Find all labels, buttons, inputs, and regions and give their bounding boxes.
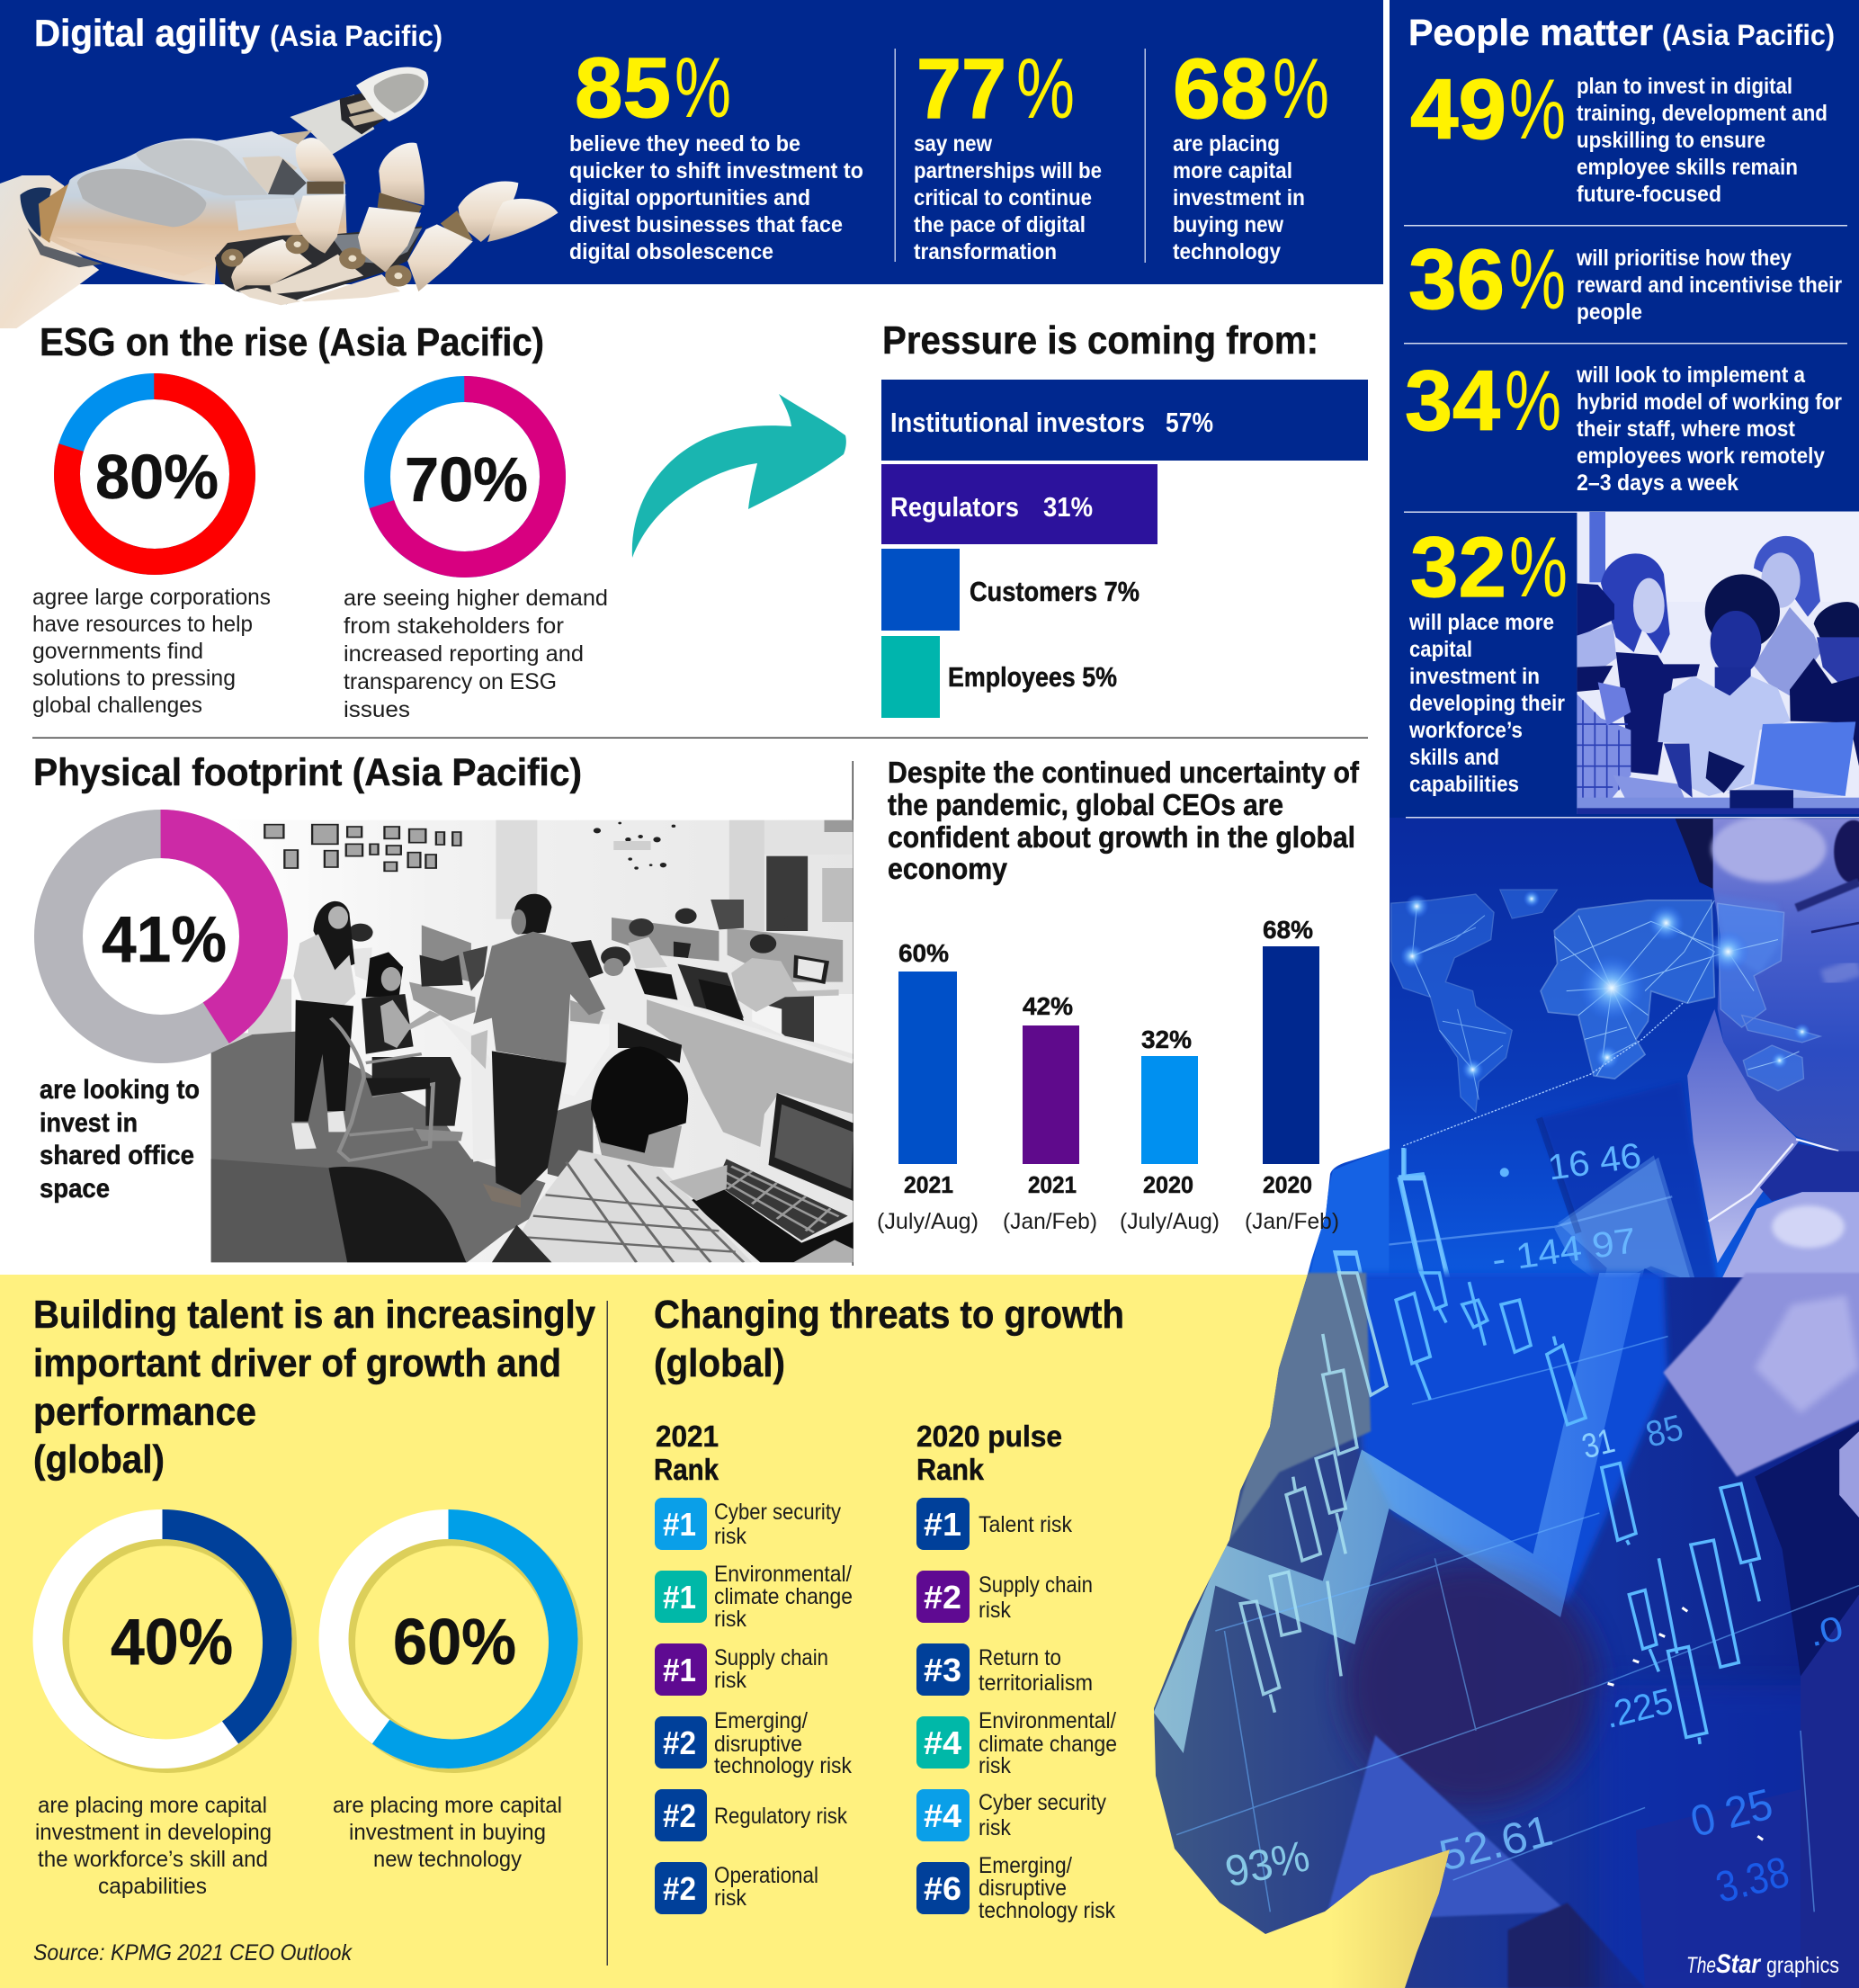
ring finger (458, 182, 518, 242)
hand at collar (1722, 1192, 1859, 1277)
stat: 49%: training, development and (1577, 101, 1828, 126)
zig-zag arrow (1154, 1273, 1640, 1753)
asia and australia network over the face (1718, 903, 1820, 1091)
text: 80% caption: governments find (32, 639, 203, 664)
credit: TheStar graphics: Star (1716, 1949, 1762, 1979)
stat: 77%: % (1016, 41, 1075, 137)
stat: 49%: upskilling to ensure (1577, 128, 1765, 153)
stat: 68%: % (1273, 41, 1329, 137)
title: people matter: (Asia Pacific) (1662, 19, 1835, 51)
stat: 49%: 49 (1410, 62, 1506, 157)
upper part: world map, face, collar (1265, 810, 1859, 1294)
text: 40% caption: the workforce’s skill and (38, 1847, 268, 1872)
list: 2021 rank: climate change (714, 1584, 853, 1609)
list: 2020 pulse rank: #2 (924, 1579, 961, 1616)
list: 2020 pulse rank: #4 (924, 1797, 961, 1834)
bar chart: CEO confidence: (Jan/Feb) (1003, 1209, 1097, 1234)
stat: 32%: skills and (1409, 745, 1499, 770)
stat: 34% (1405, 354, 1842, 496)
donut: 80%: 80% (95, 442, 219, 512)
text: 70% caption: issues (344, 697, 410, 722)
seated woman (366, 952, 403, 997)
donut: 60%: 60% (393, 1607, 516, 1679)
chart numbers: 93% (1221, 1831, 1314, 1896)
list: 2020 pulse rank: #6 (924, 1870, 961, 1907)
stat: 68%: 68 (1173, 41, 1268, 137)
heading: building talent: (global) (33, 1437, 165, 1482)
stat: 77%: critical to continue (914, 185, 1092, 210)
stat: 85%: digital opportunities and (569, 185, 810, 210)
bar chart: CEO confidence: (Jan/Feb) (1245, 1209, 1339, 1234)
heading: global CEOs confidence: economy (888, 852, 1008, 885)
bar chart: pressure sources: Employees 5% (948, 661, 1117, 693)
list: 2021 rank: risk (714, 1607, 746, 1632)
stat: 85%: quicker to shift investment to (569, 158, 863, 184)
palm body (49, 131, 347, 285)
chrome chair (331, 1018, 433, 1160)
panel: digital agility banner (0, 0, 1383, 284)
list: 2021 rank: Operational (714, 1863, 818, 1888)
bar chart: CEO confidence: 2020 (1263, 1171, 1312, 1198)
list: 2020 pulse rank: Cyber security (979, 1790, 1106, 1815)
cabinet (248, 979, 291, 1033)
stat: 32%: developing their (1409, 691, 1565, 716)
arrowhead (1554, 1158, 1696, 1287)
standing woman (313, 901, 354, 973)
list: 2020 pulse rank: risk (979, 1815, 1011, 1840)
chart numbers: 3.38 (1712, 1848, 1794, 1912)
list: 2021 rank: Rank (654, 1453, 719, 1486)
stat: 85%: digital obsolescence (569, 239, 773, 264)
stat: 85%: divest businesses that face (569, 212, 843, 237)
title: digital agility (34, 12, 442, 54)
list: 2021 rank: #2 (663, 1870, 696, 1907)
centre desk (409, 982, 475, 1021)
stat: 77%: transformation (914, 239, 1057, 264)
candlesticks left of column edge (1307, 1148, 1696, 1396)
index fingertip (290, 94, 374, 155)
stat: 68%: are placing (1173, 131, 1280, 157)
text: 40% caption: capabilities (98, 1874, 207, 1899)
candlesticks (1240, 1273, 1387, 1713)
chart numbers: 31 (1578, 1421, 1619, 1466)
title: digital agility: (Asia Pacific) (270, 20, 442, 52)
list: 2021 rank: disruptive (714, 1732, 802, 1757)
stat: 32%: will place more (1408, 610, 1554, 635)
heading: changing threats: (global) (654, 1341, 785, 1385)
stat: 32% (1408, 520, 1568, 797)
list: 2021 rank: #2 (663, 1724, 696, 1761)
list: 2021 rank: risk (714, 1885, 746, 1911)
stat: 49%: employee skills remain (1577, 155, 1798, 180)
stat: 34%: will look to implement a (1576, 363, 1806, 388)
foreground chair (328, 1167, 466, 1262)
list: 2020 pulse rank: Rank (916, 1453, 985, 1486)
list: 2021 rank: #2 (663, 1797, 696, 1834)
chart numbers: .225 (1600, 1679, 1677, 1736)
lower finger row (270, 255, 363, 294)
tie (1760, 1143, 1859, 1201)
text: 41% caption: are looking to (40, 1075, 200, 1105)
text: 70% caption: increased reporting and (344, 641, 584, 667)
list: 2020 pulse rank: risk (979, 1598, 1011, 1623)
credit: TheStar graphics (1686, 1949, 1839, 1979)
donut: 70%: 70% (405, 444, 528, 515)
text: 41% caption: space (40, 1174, 110, 1204)
list: 2020 pulse rank: territorialism (979, 1670, 1093, 1696)
bar chart: pressure sources: 57% (1166, 407, 1213, 438)
heading: pressure: Pressure is coming from: (882, 318, 1318, 363)
list: 2020 pulse rank: climate change (979, 1732, 1117, 1757)
list: 2021 rank: Cyber security (714, 1500, 841, 1525)
chart numbers: - 144 97 (1489, 1221, 1639, 1280)
text: 80% caption: global challenges (32, 693, 202, 718)
bar chart: CEO confidence: 2021 (904, 1171, 953, 1198)
bar chart: CEO confidence: 68% (1263, 916, 1313, 944)
chart numbers: 85 (1641, 1406, 1687, 1455)
keyboard (716, 1159, 848, 1240)
text: 41% caption (40, 1075, 200, 1204)
foreground man (595, 1126, 682, 1168)
list: 2020 pulse rank: 2020 pulse (916, 1419, 1062, 1453)
donut: 40% (38, 1514, 297, 1773)
left man (1577, 583, 1614, 638)
stat: 49%: future-focused (1577, 182, 1721, 207)
bar chart: CEO confidence: 60% (898, 939, 949, 967)
list: 2021 rank: #1 (663, 1506, 696, 1543)
chart numbers (1494, 1143, 1640, 1268)
stat: 49% (1410, 62, 1828, 207)
middle finger (379, 143, 425, 205)
right cubicle wall (647, 997, 854, 1147)
stat: 68%: buying new (1173, 212, 1283, 237)
stat: 36% (1408, 232, 1842, 327)
donut: 60% (324, 1514, 583, 1773)
heading: changing threats: Changing threats to growth (654, 1293, 1124, 1337)
stat: 68%: more capital (1173, 158, 1292, 184)
image: robot hand (0, 67, 558, 328)
far person right (750, 934, 776, 954)
bar chart: CEO confidence: 2021 (1028, 1171, 1077, 1198)
text: 70% caption: transparency on ESG (344, 669, 557, 694)
text: 80% caption: have resources to help (32, 612, 253, 637)
bar chart: pressure sources: 31% (1043, 491, 1093, 523)
text: 60% caption: new technology (373, 1847, 522, 1872)
right man (1814, 602, 1859, 640)
bar chart: CEO confidence: 42% (1023, 992, 1073, 1020)
list: 2020 pulse rank (916, 1419, 1117, 1923)
credit: TheStar graphics: The (1686, 1953, 1716, 1978)
stat: 32%: capabilities (1409, 772, 1519, 797)
stat: 68% (1173, 41, 1329, 264)
bar chart: pressure sources: Customers 7% (970, 576, 1140, 607)
list: 2020 pulse rank: disruptive (979, 1876, 1067, 1901)
stat: 77%: 77 (916, 41, 1006, 137)
text: 70% caption: are seeing higher demand (344, 586, 608, 611)
world map (1391, 890, 1728, 1112)
stat: 85%: 85 (575, 40, 671, 136)
chart numbers: 0 25 (1686, 1780, 1777, 1847)
back left woman (1601, 553, 1670, 654)
bar chart: pressure sources (881, 380, 1368, 718)
text: 41% caption: shared office (40, 1141, 194, 1170)
heading: building talent: Building talent is an increasingly (33, 1293, 595, 1337)
stat: 49%: plan to invest in digital (1577, 74, 1792, 99)
text: 41% caption: invest in (40, 1108, 138, 1138)
heading: physical footprint: Physical footprint (Asia Pacific) (33, 751, 582, 794)
source note: Source: KPMG 2021 CEO Outlook (33, 1940, 353, 1966)
donut: 41% (58, 834, 264, 1039)
stat: 77%: partnerships will be (914, 158, 1102, 184)
list: 2021 rank: 2021 (656, 1419, 719, 1453)
stat: 36%: people (1577, 300, 1642, 325)
arrow: teal curved (632, 394, 846, 558)
candlestick (1399, 1148, 1450, 1284)
bar chart: CEO confidence (877, 916, 1339, 1234)
stat: 32%: % (1509, 520, 1568, 615)
bar chart: CEO confidence: 32% (1141, 1025, 1192, 1053)
text: 60% caption: are placing more capital (333, 1793, 562, 1818)
heading: building talent: performance (33, 1390, 256, 1434)
chart numbers: .0 (1804, 1609, 1847, 1654)
mechanical gap (215, 227, 422, 304)
stat: 77% (914, 41, 1102, 264)
list: 2020 pulse rank: Return to (979, 1645, 1061, 1670)
text: 60% caption (333, 1793, 562, 1872)
list: 2021 rank: Supply chain (714, 1645, 828, 1670)
heading: global CEOs confidence: the pandemic, global CEOs are (888, 788, 1283, 821)
seated man centre right (567, 940, 603, 982)
standing man (514, 894, 551, 934)
stat: 34%: % (1505, 354, 1561, 449)
text: 80% caption: agree large corporations (32, 585, 271, 610)
forearm (0, 175, 99, 328)
stat: 36%: will prioritise how they (1576, 246, 1792, 271)
text: 70% caption: from stakeholders for (344, 613, 564, 639)
heading: building talent: important driver of growth and (33, 1341, 561, 1385)
stat: 77%: the pace of digital (914, 212, 1086, 237)
list: 2020 pulse rank: #4 (924, 1724, 961, 1761)
list: 2020 pulse rank: Supply chain (979, 1572, 1093, 1598)
list: 2020 pulse rank: #1 (924, 1506, 961, 1543)
bar chart: pressure sources: Regulators (890, 491, 1019, 523)
little finger (487, 199, 558, 242)
stat: 32%: workforce’s (1408, 718, 1523, 743)
wall ornament (594, 822, 675, 870)
stat: 85%: believe they need to be (569, 131, 800, 157)
list: 2020 pulse rank: Environmental/ (979, 1708, 1116, 1733)
text: 40% caption: investment in developing (35, 1820, 272, 1845)
heading: global CEOs confidence: Despite the continued uncertainty of (888, 756, 1360, 789)
floor (211, 1032, 546, 1262)
center woman (1705, 574, 1780, 649)
cuff and hand (1663, 1273, 1859, 1477)
stat: 32%: 32 (1410, 520, 1506, 615)
panel: people matter column background (1390, 0, 1859, 820)
text: 60% caption: investment in buying (349, 1820, 546, 1845)
list: 2021 rank: risk (714, 1524, 746, 1549)
stat: 36%: 36 (1408, 232, 1505, 327)
stat: 68%: technology (1173, 239, 1281, 264)
list: 2021 rank: #1 (663, 1579, 696, 1616)
hair (1676, 819, 1714, 889)
far cubicles (422, 925, 471, 982)
chart numbers (1221, 1406, 1847, 1912)
stat: 85%: % (675, 40, 731, 136)
collar (1687, 1009, 1799, 1263)
donut: 70% (378, 389, 552, 565)
stat: 32%: investment in (1409, 664, 1540, 689)
title: digital agility: Digital agility (34, 12, 261, 54)
list: 2020 pulse rank: risk (979, 1753, 1011, 1778)
image: team around laptop (1577, 512, 1859, 814)
text: 80% caption: solutions to pressing (32, 666, 236, 691)
back man behind woman (348, 924, 373, 942)
stat: 34%: employees work remotely (1577, 443, 1825, 469)
heading: changing threats (654, 1293, 1124, 1385)
laptop (1754, 721, 1855, 796)
back of monitor (618, 1023, 682, 1063)
lower part: shoulder, candlesticks and zig-zag arrow (1142, 1273, 1859, 1988)
heading: ESG on the rise: ESG on the rise (Asia Pacific) (40, 320, 544, 364)
far desks (677, 964, 744, 1018)
donut: 40%: 40% (111, 1607, 233, 1679)
image: businessman with market chart overlay (1142, 810, 1859, 1988)
text: 80% caption (32, 585, 271, 718)
list: 2021 rank: risk (714, 1668, 746, 1693)
credit: TheStar graphics: graphics (1766, 1953, 1839, 1978)
chart numbers: 16 46 (1545, 1136, 1644, 1188)
stat: 34%: 34 (1405, 354, 1500, 449)
stat: 85% (569, 40, 863, 264)
heading: global CEOs confidence (888, 756, 1360, 885)
list: 2021 rank: Environmental/ (714, 1562, 852, 1587)
stat: 36%: % (1509, 232, 1566, 327)
face (1713, 819, 1859, 1152)
list: 2021 rank: Regulatory risk (714, 1804, 847, 1829)
back right woman (1754, 536, 1820, 617)
stat: 68%: investment in (1173, 185, 1305, 210)
index finger lower (296, 138, 346, 184)
list: 2020 pulse rank: Talent risk (979, 1512, 1072, 1537)
image: office photo (211, 820, 854, 1262)
far person left (629, 918, 654, 936)
list: 2021 rank: Emerging/ (714, 1708, 808, 1733)
list: 2021 rank: #1 (663, 1652, 696, 1688)
bar chart: CEO confidence: 2020 (1143, 1171, 1193, 1198)
list: 2020 pulse rank: technology risk (979, 1898, 1115, 1923)
donut: 80% (67, 387, 243, 561)
bar chart: pressure sources: Institutional investors (890, 407, 1145, 438)
donut: 41%: 41% (102, 904, 227, 976)
main monitor and desk (690, 1186, 854, 1262)
bar chart: CEO confidence: (July/Aug) (877, 1209, 979, 1234)
stat: 34%: 2–3 days a week (1577, 470, 1738, 496)
wall frames (264, 825, 460, 871)
chart numbers: 52.61 (1434, 1806, 1557, 1881)
bar chart: CEO confidence: (July/Aug) (1120, 1209, 1220, 1234)
stat: 34%: their staff, where most (1577, 416, 1796, 442)
text: 40% caption: are placing more capital (38, 1793, 267, 1818)
grid lines (1176, 1336, 1859, 1912)
heading: global CEOs confidence: confident about growth in the global (888, 820, 1355, 854)
heading: building talent (33, 1293, 595, 1482)
list: 2021 rank: technology risk (714, 1753, 852, 1778)
table (1577, 798, 1859, 814)
stat: 32%: capital (1409, 637, 1472, 662)
text: 40% caption (35, 1793, 272, 1899)
stat: 77%: say new (914, 131, 992, 157)
title: people matter (1408, 12, 1835, 53)
stat: 49%: % (1509, 62, 1566, 157)
title: people matter: People matter (1408, 12, 1653, 53)
list: 2020 pulse rank: #3 (924, 1652, 961, 1688)
text: 70% caption (344, 586, 608, 722)
list: 2020 pulse rank: Emerging/ (979, 1853, 1072, 1878)
list: 2021 rank (654, 1419, 853, 1914)
